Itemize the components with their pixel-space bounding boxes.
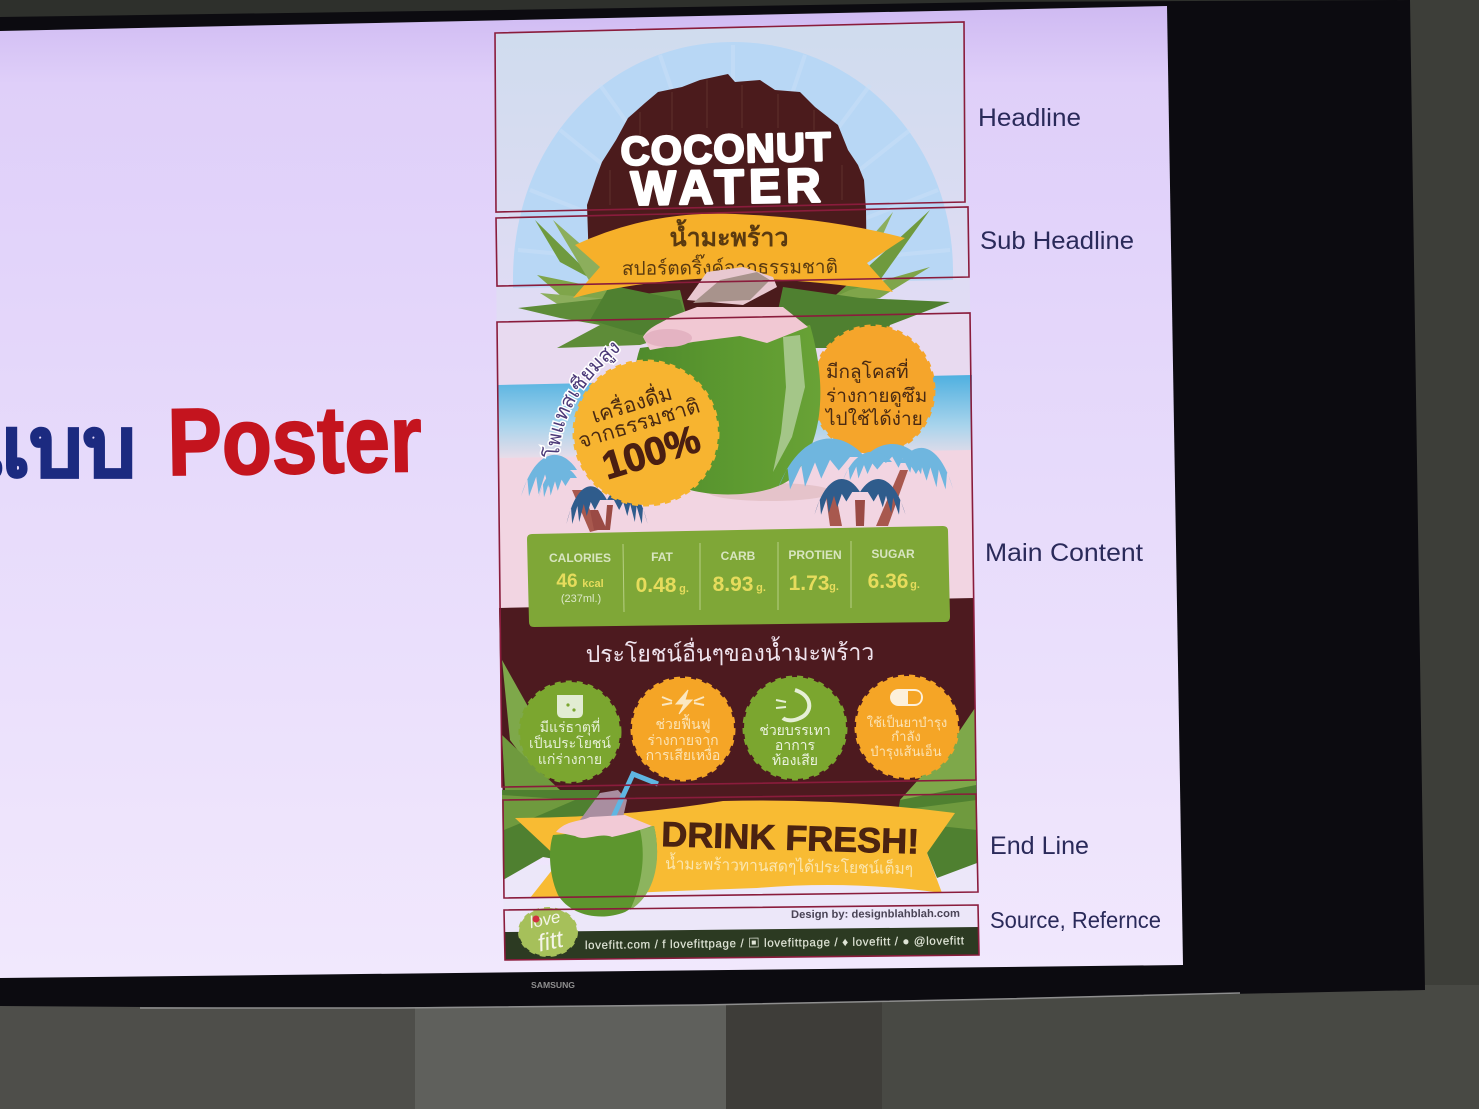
stat: calories: CALORIES [549, 551, 611, 565]
wall below the screen [0, 985, 1479, 1109]
benefit circle: diarrhoea: อาการ [775, 737, 816, 753]
benefit circle: tonic: บำรุงเส้นเอ็น [870, 742, 942, 760]
banner: drink fresh [515, 800, 955, 898]
small coconut with straw [550, 774, 658, 917]
brand: SAMSUNG: SAMSUNG [531, 981, 575, 990]
label: main content: Main Content [985, 539, 1143, 567]
label: source reference: Source, Refernce [990, 907, 1161, 933]
stat: carb [713, 549, 766, 596]
headline: Coconut Water [620, 125, 831, 216]
badge: 100 percent natural: 100% [597, 418, 705, 488]
benefit circle: diarrhoea: ช่วยบรรเทา [759, 722, 831, 738]
slide background [0, 6, 1183, 978]
coconut shell [587, 74, 867, 318]
logo: lovefitt: fitt [535, 926, 567, 958]
stat: calories: 46 [556, 571, 578, 592]
stat: calories: kcal [582, 578, 604, 590]
brown lower panel [499, 598, 977, 815]
benefit circle: tonic [856, 676, 958, 778]
stat: protien: 1.73 [789, 572, 829, 595]
badge: 100 percent natural [574, 361, 718, 505]
coconut flesh [643, 307, 808, 350]
white band above footer [503, 862, 979, 936]
orange badge: glucose [812, 326, 934, 454]
benefit circle: recovery: ช่วยฟื้นฟู [656, 714, 710, 733]
poster sky background [495, 22, 972, 400]
coconut shadow [708, 483, 832, 501]
headline: Drink Fresh: DRINK FRESH! [661, 815, 920, 862]
heading: other benefits: ประโยชน์อื่นๆของน้ำมะพร้าว [586, 636, 874, 667]
stat: sugar: SUGAR [871, 547, 915, 561]
stat: sugar: 6.36 [868, 570, 908, 593]
stat: protien [788, 548, 842, 595]
leaves behind coconut [518, 210, 950, 348]
stat: sugar [868, 547, 920, 593]
label: end line: End Line [990, 832, 1089, 860]
logo: lovefitt [519, 907, 577, 958]
wall above the screen [0, 0, 1410, 20]
headline: Coconut Water: COCONUT [620, 125, 831, 174]
slide title [0, 386, 422, 496]
stat: fat: g. [679, 583, 689, 595]
stat: carb: CARB [721, 549, 756, 563]
stat: fat: FAT [651, 550, 674, 564]
tagline: น้ำมะพร้าวทานสดๆได้ประโยชน์เต็มๆ [665, 852, 913, 878]
orange badge: glucose: มีกลูโคสที่ [826, 358, 909, 383]
benefit circle: minerals: มีแร่ธาตุที่ [540, 718, 600, 736]
footer links: lovefitt.com / f lovefittpage / ▣ lovefittpage / ♦ lovefitt / ● @lovefitt [585, 934, 965, 952]
label: headline: Headline [978, 104, 1081, 132]
stat: protien: PROTIEN [788, 548, 842, 562]
headline: Coconut Water: WATER [630, 160, 821, 216]
curved label: potassium: โพแทสเซียมสูง [538, 340, 621, 459]
stat: fat: 0.48 [636, 574, 677, 597]
Thai subtitle: น้ำมะพร้าว [669, 218, 789, 252]
sea and sand [497, 313, 974, 612]
badge: 100 percent natural: เครื่องดื่ม [588, 378, 675, 428]
benefit circle: tonic: ใช้เป็นยาบำรุง [867, 713, 947, 731]
palm trees: left [521, 455, 648, 532]
banner: sub headline [573, 214, 905, 298]
section labels [978, 104, 1161, 933]
sunburst [513, 42, 953, 288]
benefit circle: minerals: เป็นประโยชน์ [529, 734, 611, 751]
banner: sub headline: สปอร์ตดริ๊งค์จากธรรมชาติ [622, 253, 838, 280]
badge: 100 percent natural: จากธรรมชาติ [576, 394, 703, 453]
label: sub headline: Sub Headline [980, 227, 1134, 255]
stat: fat [636, 550, 689, 597]
benefit circle: minerals [520, 682, 620, 782]
leaves around benefits [502, 660, 977, 880]
word: Poster: Poster [167, 386, 422, 496]
benefit circle: minerals: แก่ร่างกาย [538, 751, 602, 767]
benefit circle: recovery: ร่างกายจาก [647, 732, 719, 748]
bezel highlight [140, 993, 1240, 1008]
nutrition panel [527, 526, 950, 627]
stat: protien: g. [829, 581, 839, 593]
palm trees: right [778, 438, 953, 526]
benefit circle: recovery: การเสียเหงื่อ [646, 746, 720, 763]
logo: lovefitt: love [528, 907, 562, 932]
benefit circle: recovery [632, 678, 734, 780]
stat: calories: (237ml.) [561, 593, 601, 605]
benefit circle: diarrhoea [744, 677, 846, 779]
stat: calories [549, 551, 611, 605]
orange badge: glucose: ร่างกายดูซึม [826, 386, 927, 407]
panel: poster [496, 23, 978, 960]
stat: carb: 8.93 [713, 573, 753, 596]
credit: Design by: designblahblah.com [791, 908, 960, 921]
stat: sugar: g. [910, 579, 920, 591]
benefit circle: diarrhoea: ท้องเสีย [772, 752, 818, 768]
section frames [495, 22, 979, 960]
orange badge: glucose: ไปใช้ได้ง่าย [824, 408, 923, 430]
large green coconut [634, 267, 832, 501]
footer band [504, 927, 979, 960]
benefit circle: tonic: กำลัง [891, 729, 921, 744]
coconut lid [687, 267, 777, 305]
stat: carb: g. [756, 582, 766, 594]
